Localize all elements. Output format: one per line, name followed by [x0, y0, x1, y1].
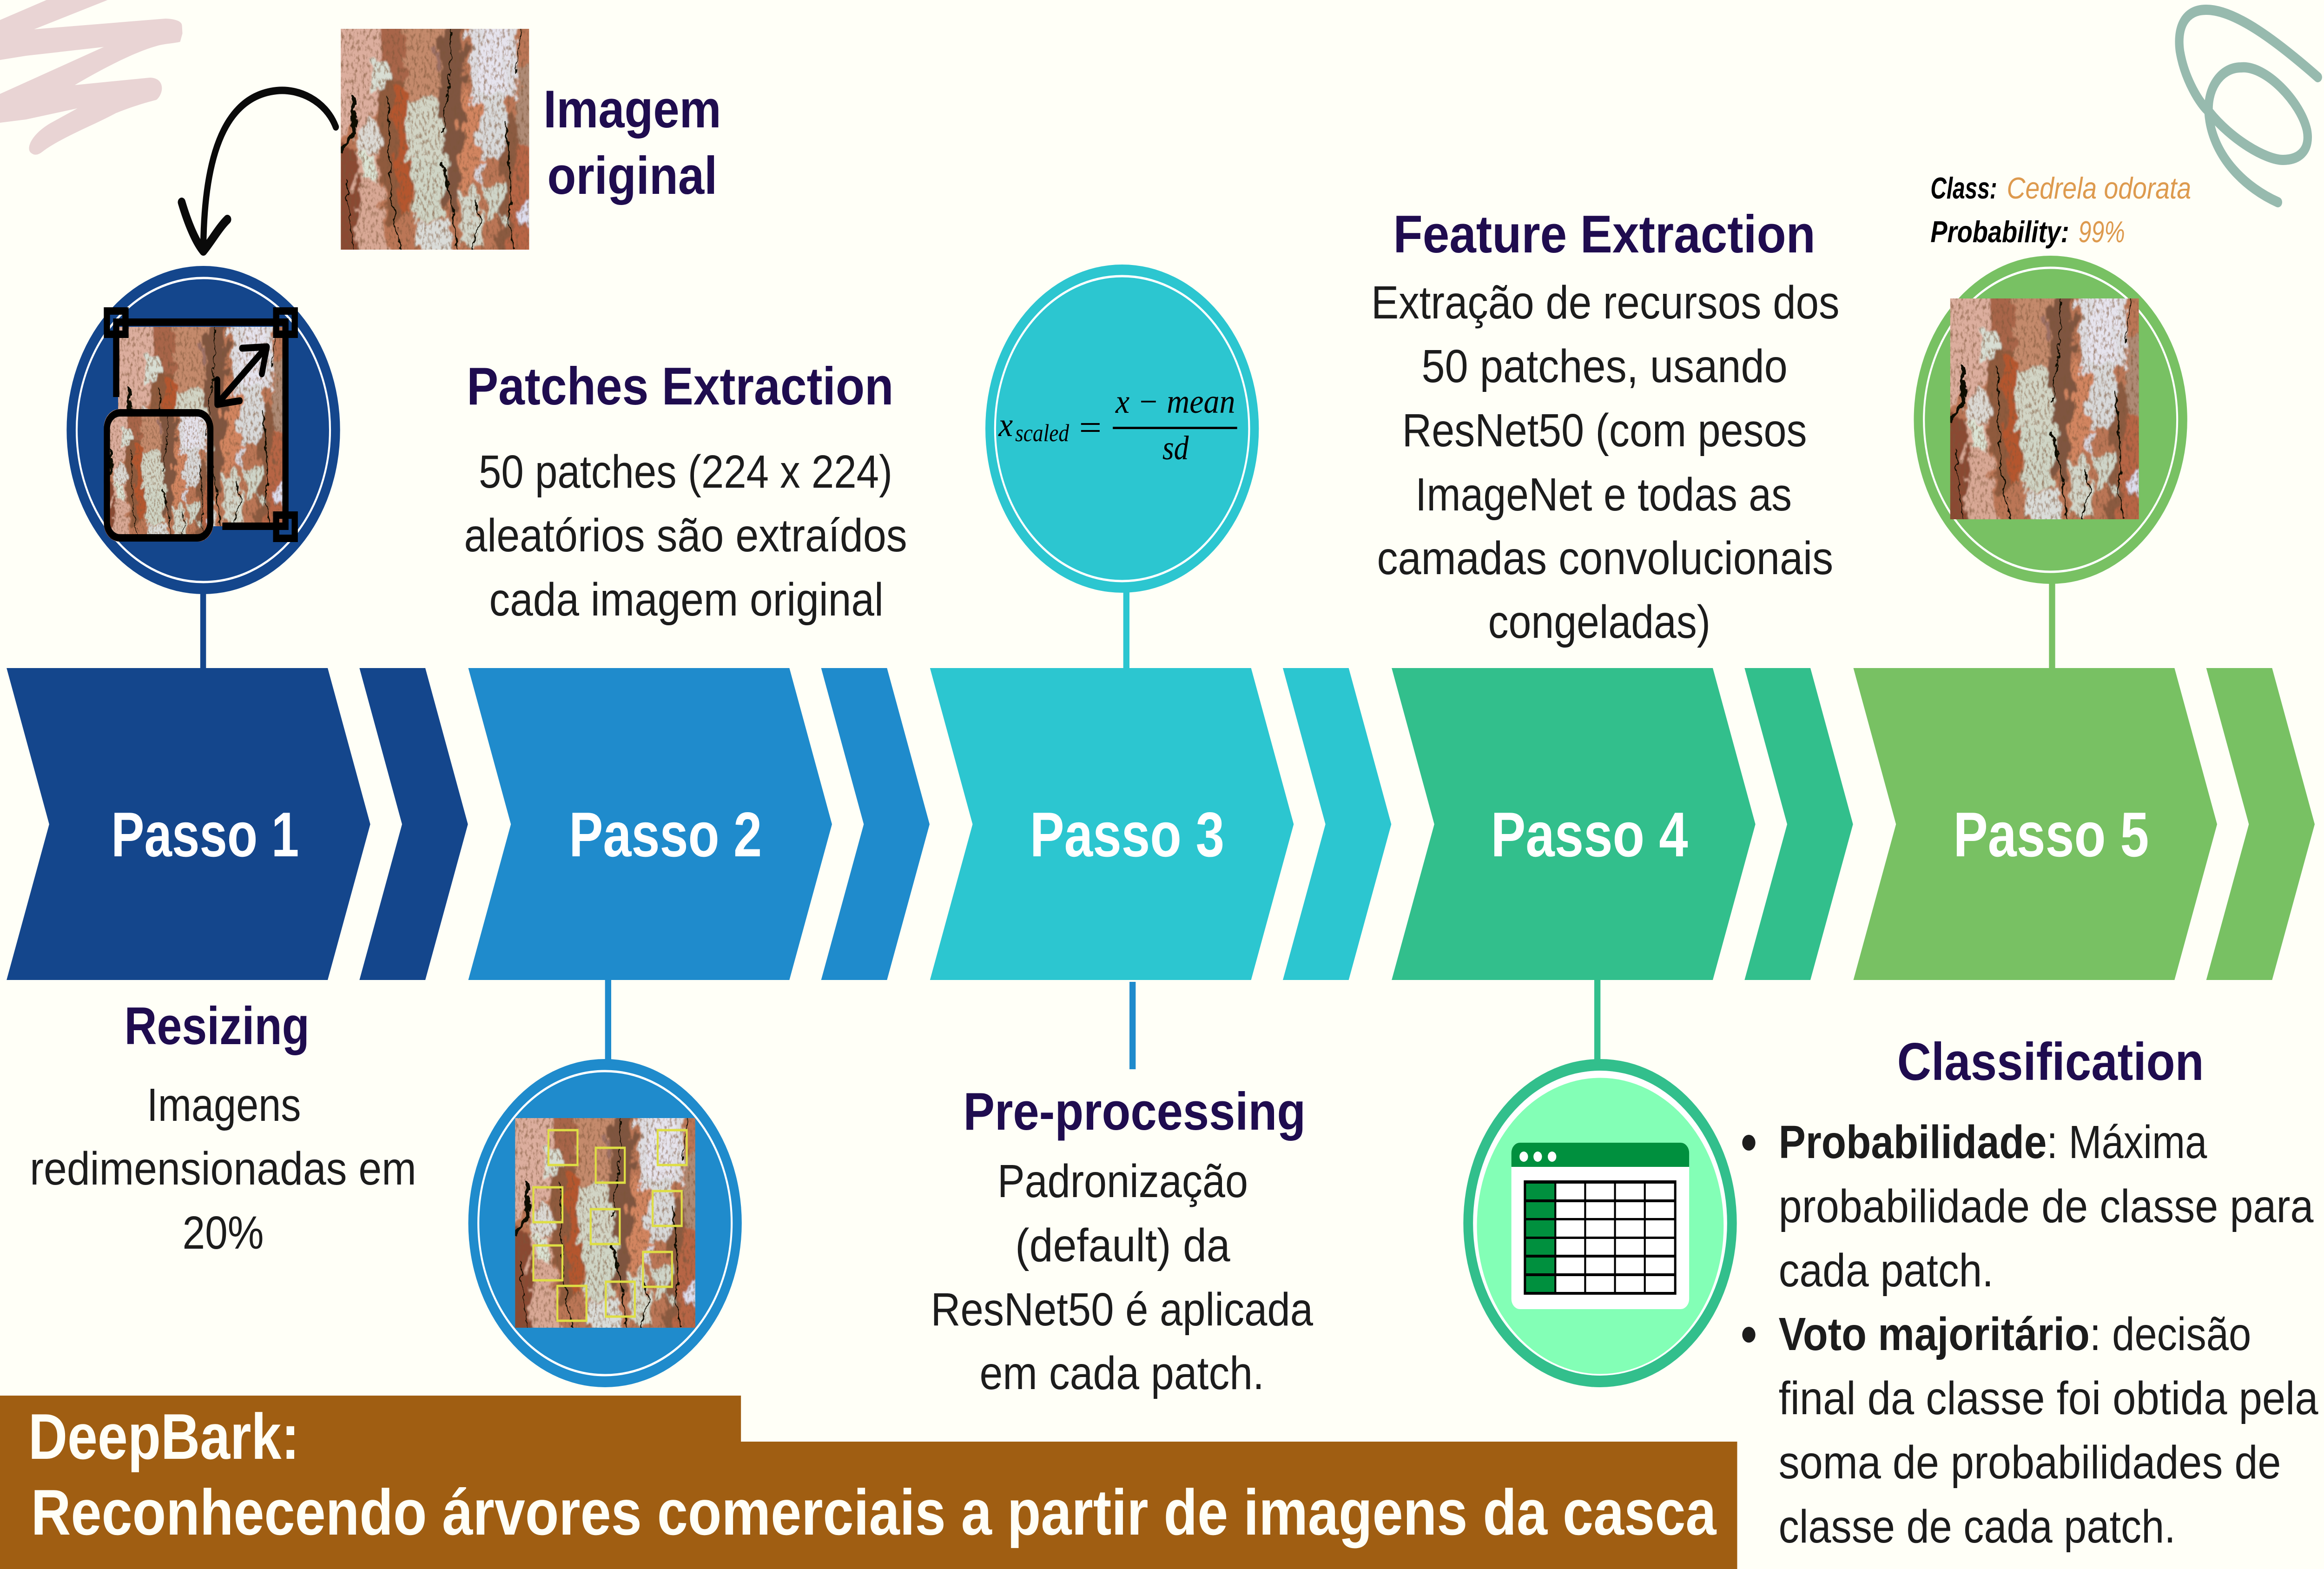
connector lines [200, 579, 2055, 1069]
formula: x − mean [1115, 383, 1235, 420]
decorative teal spiral [2179, 10, 2318, 202]
heading: Imagem original: original [548, 146, 717, 205]
text block: Feature Extraction: congeladas) [1488, 596, 1710, 648]
original bark image [330, 16, 541, 263]
text block: Resizing: Imagens [147, 1079, 301, 1131]
title banner: DeepBark: [28, 1401, 299, 1473]
bullet list: probabilidade de classe para [1779, 1180, 2314, 1232]
heading: Imagem original: Imagem [543, 80, 721, 139]
bullet list [1742, 1116, 2318, 1553]
class and probability label: Probability: [1930, 215, 2069, 249]
formula [998, 383, 1237, 467]
yellow patch boxes [534, 1130, 687, 1321]
text block: Patches Extraction: aleatórios são extraídos [464, 510, 907, 562]
text block: Classification [1742, 1033, 2318, 1553]
title banner [0, 1396, 1737, 1569]
chevron step 5 [1854, 668, 2315, 980]
text block: Pre-processing: (default) da [1015, 1219, 1230, 1271]
bullet list: classe de cada patch. [1779, 1501, 2176, 1553]
bullet list: final da classe foi obtida pela [1779, 1372, 2318, 1424]
class and probability label: Class: [1930, 171, 1997, 205]
step 5 circle: classified bark image [1914, 256, 2187, 584]
class and probability label: 99% [2079, 215, 2125, 249]
chevron step 1 [7, 668, 468, 980]
bullet list: soma de probabilidades de [1779, 1437, 2281, 1489]
bullet list: Voto majoritário [1779, 1308, 2090, 1360]
chevron step 4: Passo 4 [1491, 799, 1688, 870]
text block: Classification: Classification [1897, 1033, 2204, 1092]
bullet list: Probabilidade [1779, 1116, 2047, 1168]
chevron step 3: Passo 3 [1030, 799, 1224, 870]
text block: Patches Extraction [464, 357, 907, 626]
chevron step 3 [930, 668, 1391, 980]
bullet list: : Máxima [2047, 1116, 2207, 1168]
heading: Imagem original [543, 80, 721, 205]
text block: Pre-processing: Padronização [997, 1155, 1248, 1207]
curved arrow from original image to resizing circle [182, 90, 336, 251]
text block: Resizing [30, 997, 416, 1259]
chevron step 2: Passo 2 [569, 799, 762, 870]
text block: Feature Extraction: 50 patches, usando [1421, 340, 1788, 392]
class and probability label [1930, 171, 2191, 249]
text block: Patches Extraction: 50 patches (224 x 224) [479, 446, 892, 498]
diagonal double arrow [218, 347, 267, 404]
title banner: Reconhecendo árvores comerciais a partir de imagens da casca [31, 1476, 1717, 1549]
step 3 circle: standardisation formula [985, 265, 1259, 593]
text block: Feature Extraction: camadas convolucionais [1377, 532, 1833, 584]
chevron step 2 [469, 668, 930, 980]
text block: Feature Extraction: Feature Extraction [1393, 205, 1816, 264]
chevron step 1: Passo 1 [111, 799, 299, 870]
text block: Resizing: Resizing [125, 997, 310, 1056]
text block: Resizing: 20% [183, 1207, 264, 1259]
text block: Pre-processing [931, 1082, 1314, 1399]
text block: Pre-processing: Pre-processing [964, 1082, 1306, 1141]
step 4 circle: feature table icon [1463, 1059, 1737, 1387]
text block: Resizing: redimensionadas em [30, 1143, 416, 1195]
bullet list: cada patch. [1779, 1245, 1994, 1297]
spreadsheet window [1512, 1143, 1689, 1309]
text block: Feature Extraction: ImageNet e todas as [1415, 469, 1792, 521]
text block: Patches Extraction: Patches Extraction [467, 357, 894, 416]
text block: Patches Extraction: cada imagem original [489, 574, 884, 626]
text block: Feature Extraction: Extração de recursos dos [1371, 277, 1840, 329]
formula: scaled [1015, 419, 1070, 447]
step 1 circle: resizing icon [66, 266, 340, 594]
text block: Pre-processing: em cada patch. [980, 1347, 1264, 1399]
chevron step 5: Passo 5 [1953, 799, 2149, 870]
bullet list: : decisão [2090, 1308, 2251, 1360]
text block: Feature Extraction: ResNet50 (com pesos [1402, 404, 1807, 457]
formula: sd [1162, 429, 1189, 467]
decorative pink scribble [0, 0, 182, 155]
formula: x [998, 406, 1013, 444]
chevron step 4 [1392, 668, 1853, 980]
small resized bark image [104, 409, 214, 542]
text block: Feature Extraction [1371, 205, 1840, 648]
class and probability label: Cedrela odorata [2007, 171, 2191, 205]
step 2 circle: patches on bark image [469, 1059, 742, 1387]
text block: Pre-processing: ResNet50 é aplicada [931, 1284, 1314, 1336]
